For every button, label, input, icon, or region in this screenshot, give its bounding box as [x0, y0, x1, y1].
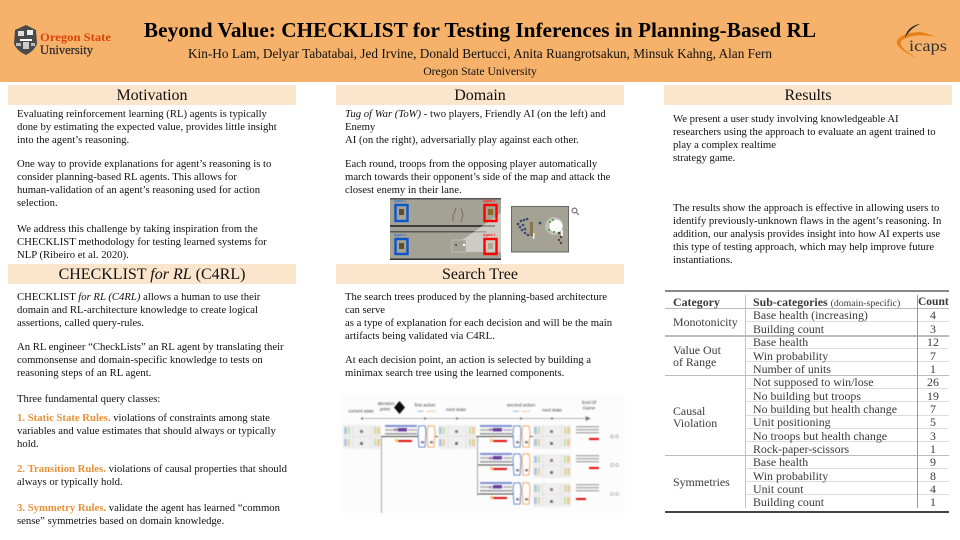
text block: C4RL: 3. Symmetry Rules. validate the agent has learned “common	[17, 502, 280, 514]
timeline labels: next state	[446, 407, 466, 412]
affiliation: Oregon State University	[423, 65, 537, 78]
sub-category labels: Building count	[753, 495, 824, 509]
agent labels: Agent 1	[394, 199, 407, 203]
heading: Results: Results	[784, 87, 832, 104]
count values: 12	[927, 335, 939, 349]
timeline labels: point	[380, 406, 391, 412]
count values: 19	[927, 389, 939, 403]
agent labels: Agent 1	[483, 199, 496, 203]
text block: search tree: can serve	[345, 304, 385, 316]
header band	[0, 0, 960, 82]
logo wordmark: Oregon State	[40, 31, 111, 44]
sub-category labels: Unit count	[753, 482, 804, 496]
text block: C4RL: assertions, called query-rules.	[17, 317, 144, 329]
heading: Motivation: Motivation	[116, 87, 188, 104]
text block: motivation: Evaluating reinforcement learning (RL) agents is typically	[17, 108, 267, 120]
second level rows	[480, 425, 512, 442]
table: query-rule categories	[665, 290, 949, 513]
text block: C4RL: variables and value estimates that should always or typically	[17, 425, 276, 437]
win probabilities: 99.4%	[489, 428, 500, 432]
logo wordmark: University	[40, 42, 93, 57]
text block: domain: AI (on the right), adversarially play against each other.	[345, 134, 579, 146]
category labels: Value Out	[673, 343, 721, 357]
enemy agent markers	[484, 205, 496, 254]
text block: motivation: done by estimating the expected value, provides little insight	[17, 121, 277, 133]
count values: 5	[930, 415, 936, 429]
agent labels	[394, 199, 496, 237]
agent labels: Agent 1	[394, 233, 407, 237]
text block: results: play a complex realtime	[673, 139, 776, 151]
count values: 9	[930, 455, 936, 469]
count values: 1	[930, 442, 936, 456]
timeline labels: enemy	[426, 409, 436, 413]
timeline labels: hard	[417, 409, 424, 413]
text block: motivation: NLP (Ribeiro et al. 2020).	[17, 249, 129, 261]
text block: search tree: artifacts being validated via C4RL.	[345, 330, 495, 342]
icon: shield	[14, 25, 37, 55]
win probabilities: 99.4%	[394, 428, 405, 432]
category labels: Causal	[673, 404, 705, 418]
logo: icaps	[896, 24, 947, 58]
sub-category labels: No building but health change	[753, 402, 897, 416]
heading: Search Tree: Search Tree	[442, 266, 518, 283]
win probabilities: 99.5%	[489, 456, 500, 460]
count values: 1	[930, 362, 936, 376]
text block: C4RL	[17, 291, 287, 527]
sub-category labels: Base health (increasing)	[753, 308, 868, 322]
wedge	[454, 206, 511, 252]
count values: 26	[927, 375, 939, 389]
count values: 8	[930, 469, 936, 483]
sub-category labels: Win probability	[753, 349, 828, 363]
text block: search tree: At each decision point, an action is selected by building a	[345, 354, 591, 366]
authors: Kin-Ho Lam, Delyar Tabatabai, Jed Irvine, Donald Bertucci, Anita Ruangrotsakun, Minsuk Kahng, Alan Fern	[188, 46, 772, 61]
heading: CHECKLIST for RL	[8, 264, 296, 284]
category labels	[673, 315, 738, 489]
count values: 4	[930, 482, 936, 496]
table header: Category	[673, 295, 720, 309]
count values	[927, 308, 939, 509]
count values: 7	[930, 402, 936, 416]
text block: search tree: minimax search tree using the learned components.	[345, 367, 564, 379]
count values: 3	[930, 322, 936, 336]
text block: search tree	[345, 291, 612, 379]
count values: 7	[930, 349, 936, 363]
timeline	[361, 416, 590, 420]
text block: results	[673, 113, 942, 266]
heading: Search Tree	[336, 264, 624, 284]
text block: motivation: We address this challenge by taking inspiration from the	[17, 223, 258, 235]
timeline labels	[348, 400, 597, 414]
category labels: of Range	[673, 355, 716, 369]
diagram: search tree	[342, 400, 620, 513]
end of game notes	[576, 426, 599, 491]
logo: icaps: icaps	[909, 38, 947, 55]
text block: motivation: into the agent’s reasoning.	[17, 134, 129, 146]
timeline labels: next state	[542, 408, 562, 412]
text block: results: instantiations.	[673, 254, 733, 266]
text block: C4RL: always or typically hold.	[17, 476, 123, 488]
text block: C4RL: Three fundamental query classes:	[17, 393, 160, 405]
sub-category labels: No troops but health change	[753, 429, 887, 443]
text block: motivation	[17, 108, 277, 261]
timeline labels: Game	[583, 406, 596, 410]
text block: C4RL: CHECKLIST for RL (C4RL) allows a human to use their	[17, 291, 260, 303]
text block: domain: march towards their opponent’s side of the map and attack the	[345, 171, 610, 183]
friendly agent markers	[396, 205, 408, 254]
first level	[385, 425, 417, 442]
category labels: Monotonicity	[673, 315, 738, 329]
text block: motivation: CHECKLIST methodology for testing learned systems for	[17, 236, 267, 248]
text block: C4RL: sense” symmetries based on domain knowledge.	[17, 515, 224, 527]
sub-category labels: Number of units	[753, 362, 831, 376]
text block: search tree: The search trees produced by the planning-based architecture	[345, 291, 607, 303]
sub-category labels: No building but troops	[753, 389, 861, 403]
inset view	[512, 206, 568, 252]
text block: results: strategy game.	[673, 152, 735, 164]
timeline labels: decision	[378, 401, 395, 406]
text block: domain	[345, 108, 610, 196]
sub-category labels: Rock-paper-scissors	[753, 442, 849, 456]
title: Beyond Value: CHECKLIST for Testing Inferences in Planning-Based RL	[144, 18, 816, 42]
text block: C4RL: 2. Transition Rules. violations of causal properties that should	[17, 463, 287, 475]
text block: motivation: One way to provide explanations for agent’s reasoning is to	[17, 158, 271, 170]
image: tug of war game map	[390, 198, 580, 260]
text block: C4RL: An RL engineer “CheckLists” an RL agent by translating their	[17, 341, 284, 353]
table header: Sub-categories (domain-specific)	[753, 295, 900, 309]
sub-category labels: Not supposed to win/lose	[753, 375, 874, 389]
text block: results: identify previously-unknown flaws in the agent’s reasoning. In	[673, 215, 941, 227]
category labels: Violation	[673, 416, 717, 430]
count values: 1	[930, 495, 936, 509]
text block: C4RL: domain and RL-architecture knowledge to create logical	[17, 304, 258, 316]
win probabilities	[394, 428, 500, 490]
text block: results: addition, our analysis provides insight into how AI experts use	[673, 228, 940, 240]
logo wordmark	[40, 31, 111, 57]
sub-category labels: Building count	[753, 322, 824, 336]
heading: Results	[664, 85, 952, 105]
text block: C4RL: 1. Static State Rules. violations of constraints among state	[17, 412, 270, 424]
text block: C4RL: commonsense and domain-specific knowledge to tests on	[17, 354, 263, 366]
timeline labels: second action	[507, 402, 536, 408]
heading: Motivation	[8, 85, 296, 105]
sub-category labels: Base health	[753, 335, 808, 349]
text block: search tree: as a type of explanation for each decision and will be the main	[345, 317, 612, 329]
timeline labels: first action	[415, 402, 436, 408]
current state	[343, 425, 381, 449]
text block: results: We present a user study involving knowledgeable AI	[673, 113, 899, 125]
agent labels: Agent 1	[483, 233, 496, 237]
map panel	[390, 198, 511, 260]
heading: Domain	[336, 85, 624, 105]
sub-category labels: Win probability	[753, 469, 828, 483]
text block: motivation: human-validation of an agent’s reasoning used for action	[17, 184, 260, 196]
decision point marker	[394, 401, 405, 414]
logo: Oregon State University	[14, 25, 111, 57]
win probabilities: 0.1%	[489, 486, 498, 490]
heading: CHECKLIST for RL: CHECKLIST for RL (C4RL)	[59, 266, 245, 283]
category labels: Symmetries	[673, 475, 730, 489]
sub-category labels: Base health	[753, 455, 808, 469]
timeline labels: enemy	[521, 409, 531, 413]
table header: Count	[918, 296, 949, 308]
text block: motivation: consider planning-based RL agents. This allows for	[17, 171, 237, 183]
timeline labels: End Of	[582, 400, 597, 405]
count values: 4	[930, 308, 936, 322]
text block: domain: Enemy	[345, 121, 375, 133]
text block: C4RL: reasoning steps of an RL agent.	[17, 367, 151, 379]
text block: results: The results show the approach is effective in allowing users to	[673, 202, 939, 214]
text block: C4RL: hold.	[17, 438, 39, 450]
icon: magnifier	[572, 208, 579, 215]
text block: domain: Tug of War (ToW) - two players, Friendly AI (on the left) and	[345, 108, 606, 120]
count values: 3	[930, 429, 936, 443]
table header	[673, 295, 949, 309]
text block: domain: Each round, troops from the opposing player automatically	[345, 158, 597, 170]
timeline labels: current state	[348, 408, 374, 414]
table rules	[665, 290, 949, 292]
heading: Domain: Domain	[454, 87, 506, 104]
text block: motivation: selection.	[17, 197, 58, 209]
sub-category labels: Unit positioning	[753, 415, 831, 429]
sub-category labels	[753, 308, 897, 509]
connector lines	[382, 436, 478, 513]
timeline labels: hard	[513, 409, 519, 413]
text block: domain: closest enemy in their lane.	[345, 184, 462, 196]
text block: results: this type of testing approach, which may help improve future	[673, 241, 934, 253]
text block: results: researchers using the approach to evaluate an agent trained to	[673, 126, 936, 138]
